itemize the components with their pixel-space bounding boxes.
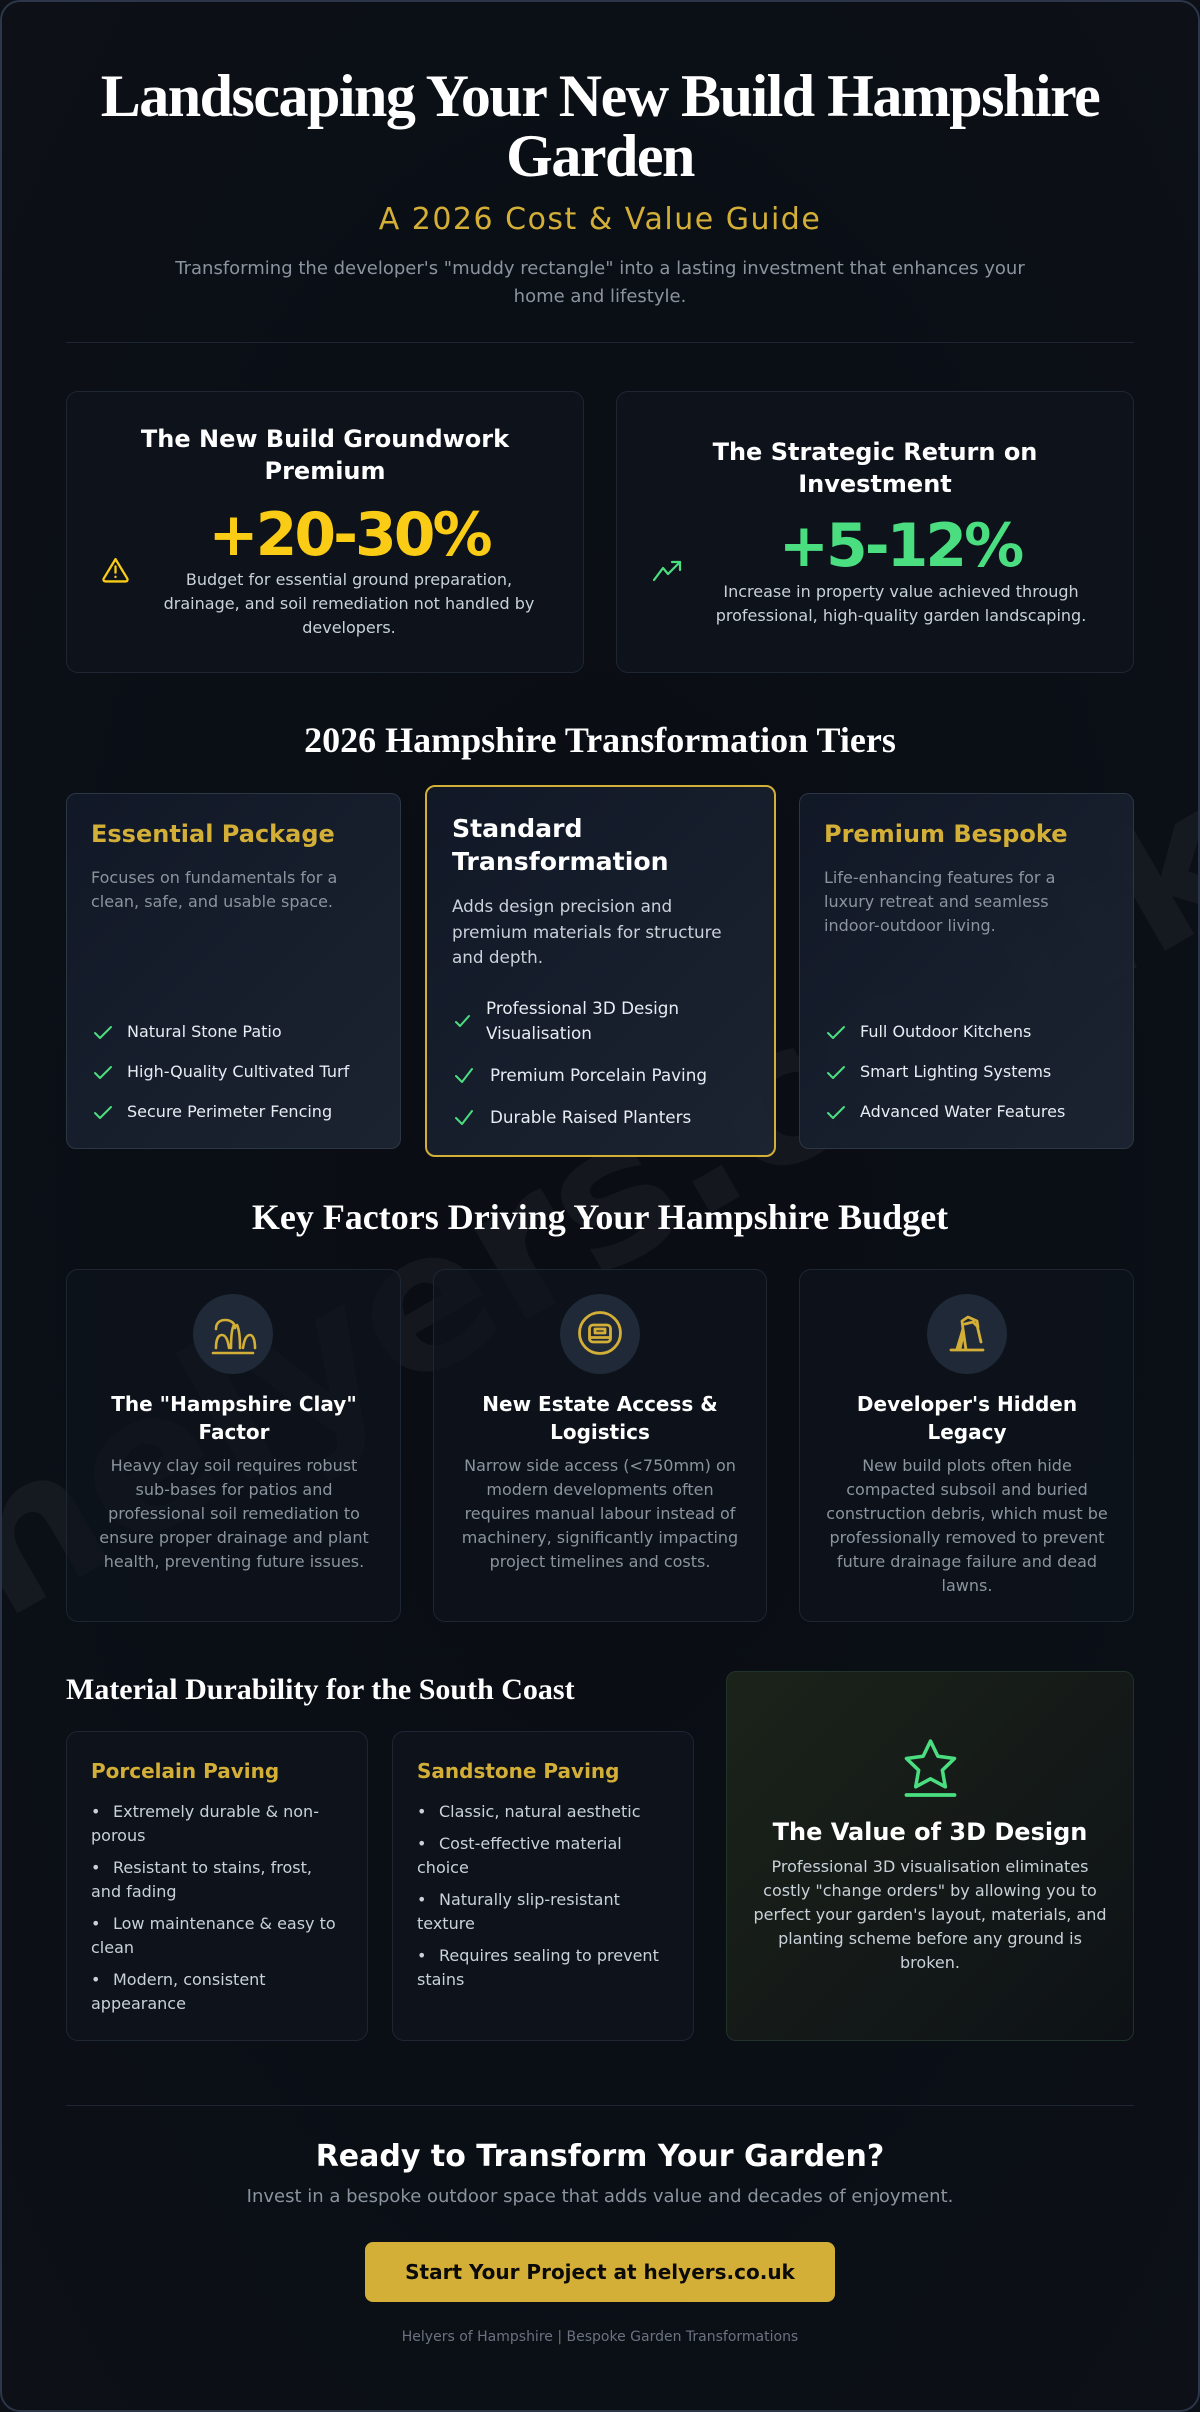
heading xyxy=(482,1392,718,1444)
tier description: Adds design precision and xyxy=(452,896,672,916)
tier description: luxury retreat and seamless xyxy=(824,892,1049,911)
title xyxy=(101,63,1100,189)
bullet xyxy=(417,1890,620,1933)
icons: checks xyxy=(827,1026,845,1119)
tier description: Life-enhancing features for a xyxy=(824,868,1055,887)
title: Landscaping Your New Build Hampshire xyxy=(101,63,1099,129)
bullet: • xyxy=(417,1890,426,1909)
material name: Porcelain Paving xyxy=(91,1759,279,1783)
feature list xyxy=(827,1022,1065,1121)
material name: Sandstone Paving xyxy=(417,1759,620,1783)
intro text: home and lifestyle. xyxy=(514,286,686,307)
item: 3D design: Visualisation xyxy=(486,1023,592,1043)
icon: trending up xyxy=(652,560,682,582)
icon: clay plant xyxy=(193,1294,273,1374)
description: health, preventing future issues. xyxy=(104,1552,364,1571)
header xyxy=(101,63,1100,307)
description: Budget for essential ground preparation, xyxy=(186,570,512,589)
subtitle: A 2026 Cost & Value Guide xyxy=(379,202,821,237)
description: requires manual labour instead of xyxy=(465,1504,735,1523)
bullet xyxy=(91,1802,319,1845)
description: perfect your garden's layout, materials, and xyxy=(754,1905,1106,1924)
description: planting scheme before any ground is xyxy=(778,1929,1082,1948)
button xyxy=(365,2242,835,2302)
panel: standard transformation xyxy=(425,785,776,1157)
bullet: appearance xyxy=(91,1994,186,2013)
item: porcelain: Premium Porcelain Paving xyxy=(490,1065,707,1085)
heading: key factors: Key Factors Driving Your Hampshire Budget xyxy=(252,1197,948,1237)
heading xyxy=(111,1392,357,1444)
button: Start Your Project at helyers.co.uk xyxy=(405,2260,795,2284)
footer note: Helyers of Hampshire | Bespoke Garden Transformations xyxy=(402,2329,798,2345)
bullet: • xyxy=(91,1858,100,1877)
panel: groundwork premium xyxy=(66,391,584,673)
tier description xyxy=(452,896,722,967)
heading: Premium xyxy=(264,457,386,485)
text: clay factor xyxy=(99,1392,369,1571)
tier description xyxy=(824,868,1055,935)
icon: star xyxy=(904,1739,956,1797)
icon: access gate xyxy=(560,1294,640,1374)
panel: hidden legacy xyxy=(799,1269,1134,1622)
bullet: Classic, natural aesthetic xyxy=(439,1802,641,1821)
description xyxy=(99,1456,369,1571)
description: Increase in property value achieved through xyxy=(723,582,1079,601)
heading: Ready to Transform Your Garden? xyxy=(316,2139,884,2174)
bullet xyxy=(417,1834,622,1877)
text: Invest in a bespoke outdoor space that adds value and decades of enjoyment. xyxy=(247,2186,953,2207)
heading: material durability: Material Durability for the South Coast xyxy=(66,1673,575,1706)
bullet: • xyxy=(417,1946,426,1965)
heading: Legacy xyxy=(927,1420,1007,1444)
icons: checks xyxy=(455,1015,473,1125)
panel: sandstone paving xyxy=(392,1731,694,2041)
bullet list xyxy=(417,1802,659,1989)
description: developers. xyxy=(302,618,396,637)
item: kitchens: Full Outdoor Kitchens xyxy=(860,1022,1031,1041)
stat: +20-30% xyxy=(208,500,490,570)
feature list xyxy=(455,998,707,1127)
heading: The "Hampshire Clay" xyxy=(111,1392,357,1416)
description: project timelines and costs. xyxy=(490,1552,710,1571)
bullet: • xyxy=(91,1970,100,1989)
tier name: Premium Bespoke xyxy=(824,820,1068,848)
description: professional soil remediation to xyxy=(108,1504,360,1523)
bullet: • xyxy=(417,1802,426,1821)
bullet: choice xyxy=(417,1858,469,1877)
heading xyxy=(857,1392,1077,1444)
description: sub-bases for patios and xyxy=(135,1480,333,1499)
intro text: Transforming the developer's "muddy rectangle" into a lasting investment that enhances your xyxy=(175,258,1025,279)
bullet: • xyxy=(91,1802,100,1821)
tier name: Transformation xyxy=(452,847,669,876)
bullet: and fading xyxy=(91,1882,177,1901)
text: estate access xyxy=(462,1392,738,1571)
item: water: Advanced Water Features xyxy=(860,1102,1065,1121)
item: fencing: Secure Perimeter Fencing xyxy=(127,1102,332,1121)
bullet: • xyxy=(91,1914,100,1933)
stat: +5-12% xyxy=(779,511,1021,581)
description xyxy=(826,1456,1108,1595)
tier name: Standard xyxy=(452,814,583,843)
bullet xyxy=(91,1970,266,2013)
heading: Developer's Hidden xyxy=(857,1392,1077,1416)
bullet: Resistant to stains, frost, xyxy=(113,1858,312,1877)
tier name xyxy=(452,814,669,876)
icon: warning triangle xyxy=(102,558,129,583)
panel: clay factor xyxy=(66,1269,401,1622)
description: Heavy clay soil requires robust xyxy=(111,1456,357,1475)
item: turf: High-Quality Cultivated Turf xyxy=(127,1062,349,1081)
tier description: indoor-outdoor living. xyxy=(824,916,996,935)
description: professional, high-quality garden landscaping. xyxy=(716,606,1086,625)
tier description xyxy=(91,868,337,911)
icons: checks xyxy=(94,1026,112,1119)
heading: Factor xyxy=(198,1420,270,1444)
tier description: and depth. xyxy=(452,947,543,967)
bullet: Modern, consistent xyxy=(113,1970,266,1989)
item: lighting: Smart Lighting Systems xyxy=(860,1062,1051,1081)
panel: estate access xyxy=(433,1269,767,1622)
panel: essential package xyxy=(66,793,401,1149)
item: 3D design xyxy=(486,998,679,1043)
bullet: porous xyxy=(91,1826,145,1845)
description: costly "change orders" by allowing you to xyxy=(763,1881,1097,1900)
item: patio: Natural Stone Patio xyxy=(127,1022,282,1041)
tier name: Essential Package xyxy=(91,820,335,848)
description xyxy=(164,570,534,637)
heading: Logistics xyxy=(550,1420,650,1444)
heading: Investment xyxy=(798,470,952,498)
description: drainage, and soil remediation not handled by xyxy=(164,594,534,613)
bullet: clean xyxy=(91,1938,134,1957)
text: hidden legacy xyxy=(826,1392,1108,1595)
bullet: • xyxy=(417,1834,426,1853)
intro text xyxy=(175,258,1025,307)
item: 3D design: Professional 3D Design xyxy=(486,998,679,1018)
bullet: Requires sealing to prevent xyxy=(439,1946,659,1965)
bullet xyxy=(91,1858,312,1901)
description: Professional 3D visualisation eliminates xyxy=(772,1857,1088,1876)
description: professionally removed to prevent xyxy=(829,1528,1105,1547)
description: modern developments often xyxy=(486,1480,714,1499)
heading: The Value of 3D Design xyxy=(773,1818,1087,1846)
bullet xyxy=(417,1946,659,1989)
description: ensure proper drainage and plant xyxy=(99,1528,369,1547)
tier description: Focuses on fundamentals for a xyxy=(91,868,337,887)
bullet: Low maintenance & easy to xyxy=(113,1914,336,1933)
description xyxy=(716,582,1086,625)
icon: excavator crane xyxy=(927,1294,1007,1374)
heading: tiers: 2026 Hampshire Transformation Tiers xyxy=(304,720,896,760)
description xyxy=(754,1855,1106,1975)
title: Garden xyxy=(506,123,694,189)
call to action xyxy=(66,2130,1134,2350)
bullet list xyxy=(91,1802,336,2013)
feature list xyxy=(94,1022,350,1121)
panel: premium bespoke xyxy=(799,793,1134,1149)
description: lawns. xyxy=(942,1576,992,1595)
heading: The Strategic Return on xyxy=(713,438,1037,466)
item: planters: Durable Raised Planters xyxy=(490,1107,691,1127)
description: construction debris, which must be xyxy=(826,1504,1108,1523)
heading xyxy=(141,425,510,485)
bullet: texture xyxy=(417,1914,475,1933)
heading xyxy=(712,438,1037,498)
panel: porcelain paving xyxy=(66,1731,368,2041)
description: compacted subsoil and buried xyxy=(846,1480,1088,1499)
description: broken. xyxy=(900,1953,960,1972)
panel: value of 3D design xyxy=(726,1671,1134,2041)
description: future drainage failure and dead xyxy=(837,1552,1097,1571)
bullet: Naturally slip-resistant xyxy=(439,1890,620,1909)
description: machinery, significantly impacting xyxy=(462,1528,738,1547)
heading: The New Build Groundwork xyxy=(141,425,509,453)
description: New build plots often hide xyxy=(862,1456,1072,1475)
tier description: premium materials for structure xyxy=(452,922,722,942)
description: Narrow side access (<750mm) on xyxy=(464,1456,736,1475)
bullet xyxy=(91,1914,336,1957)
panel: strategic return xyxy=(616,391,1134,673)
bullet: Cost-effective material xyxy=(439,1834,622,1853)
bullet: stains xyxy=(417,1970,464,1989)
heading: New Estate Access & xyxy=(482,1392,718,1416)
tier description: clean, safe, and usable space. xyxy=(91,892,333,911)
description xyxy=(462,1456,738,1571)
bullet: Extremely durable & non- xyxy=(113,1802,319,1821)
